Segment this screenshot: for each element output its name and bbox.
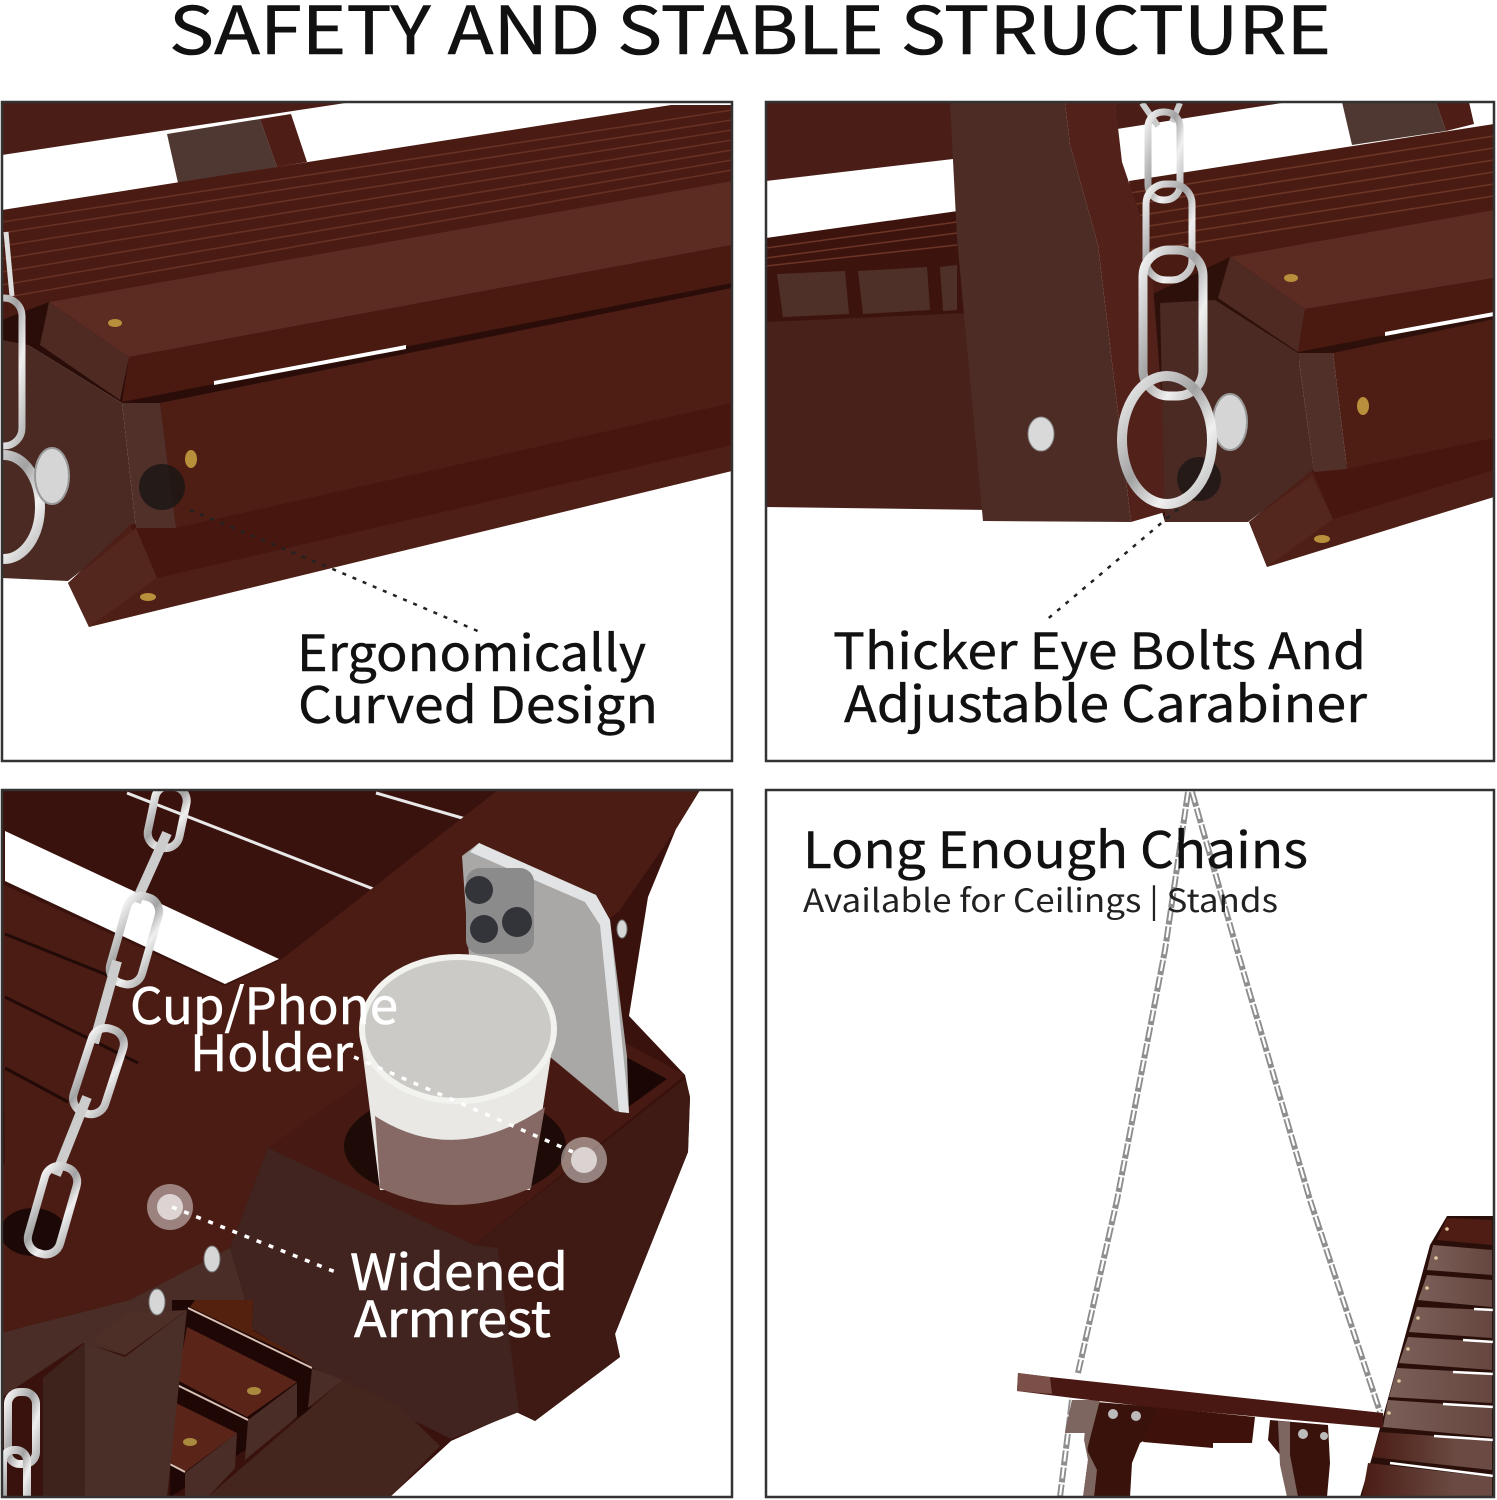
wood: front leg (43, 1310, 187, 1497)
wood: slat ends (777, 265, 957, 317)
wood: seat slats right (1129, 124, 1494, 310)
wood: side plate (2, 340, 136, 581)
wood: lower rail (68, 400, 732, 627)
caption: cup/phone holder: Holder (190, 1014, 354, 1086)
caption: widened armrest: Widened (350, 1233, 568, 1305)
wood: back slat right (1115, 102, 1288, 129)
wood: vertical post front (950, 102, 1131, 522)
gap in armrest (214, 345, 406, 385)
callout markers (147, 1137, 607, 1230)
wood: back slat left (766, 102, 953, 181)
wood: armrest top (49, 181, 732, 357)
callout leader line (190, 510, 480, 632)
panel border (766, 102, 1494, 761)
icon: hanging chains (1060, 792, 1380, 1497)
icon: silver bolts (149, 920, 627, 1315)
wood: overall silhouette (2, 790, 700, 1497)
wood: seat slats left (2, 884, 282, 1170)
thin gaps (127, 793, 469, 890)
caption: cup/phone holder: Cup/Phone (130, 967, 398, 1039)
icon: phone (462, 843, 629, 1113)
wood: side plate (1160, 300, 1314, 522)
wood: vertical post side (1065, 102, 1172, 522)
wood: armrest box top (268, 1040, 685, 1245)
heading: long enough chains: Long Enough Chains (803, 811, 1308, 883)
panel border (2, 102, 732, 761)
wood: lower frame left (766, 312, 990, 510)
icon: silver bolt (1028, 417, 1054, 451)
white gap between slats (5, 831, 279, 984)
wood: armrest underside (122, 245, 732, 402)
leader lines (172, 1057, 573, 1273)
wood: dark underlay (2, 181, 732, 528)
wood: main armrest beam (2, 790, 700, 1333)
wood: seat slats left (766, 210, 965, 322)
caption: cup/phone holder (130, 967, 398, 1086)
swing: front leg (1065, 1400, 1157, 1497)
caption: ergonomically curved design (297, 614, 658, 738)
panel: eye bolts and carabiner (766, 102, 1494, 622)
callout marker (1177, 457, 1221, 501)
panel border (766, 790, 1494, 1497)
caption: widened armrest (350, 1233, 568, 1352)
panel: cup and phone holder (0, 783, 700, 1500)
icon: chain and ring (0, 232, 69, 559)
panel: long enough chains (1017, 792, 1494, 1497)
caption: thicker eye bolts (833, 612, 1368, 737)
wood: main front face (1298, 319, 1494, 472)
swing: armrest seat (1017, 1373, 1383, 1428)
callout marker (139, 464, 185, 510)
wood: back post (167, 114, 307, 183)
wood: seat slats (3, 105, 731, 320)
panel border (2, 790, 732, 1497)
caption: thicker eye bolts: Adjustable Carabiner (844, 665, 1368, 737)
icon: cup holder hole (344, 1091, 566, 1201)
callout leader line (1044, 509, 1178, 622)
wood: back post right (1342, 102, 1474, 145)
wood: phone slot (620, 1056, 667, 1113)
swing: apron (1143, 1407, 1255, 1448)
icon: chain hole (0, 1208, 66, 1256)
wood: back slat (2, 102, 352, 155)
caption: ergonomically curved design: Curved Design (298, 666, 658, 738)
icon: paper cup (361, 957, 555, 1205)
swing: rear leg (1268, 1420, 1330, 1497)
wood: dark underlay (1130, 257, 1494, 522)
wood: main front face (122, 288, 732, 528)
caption: ergonomically curved design: Ergonomically (297, 614, 646, 686)
wood: lower rail (1249, 435, 1494, 567)
wood: beam front face (2, 1248, 254, 1397)
caption: widened armrest: Armrest (354, 1280, 551, 1352)
icon: brass screws (183, 1387, 261, 1446)
swing: backrest slats (1360, 1216, 1494, 1497)
icon: brass screws (1284, 274, 1369, 543)
subheading: available for ceilings and stands: Available for Ceilings | Stands (803, 876, 1278, 922)
wood: box front left (230, 1148, 519, 1439)
icon: chain, carabiner and ring (1122, 103, 1212, 504)
icon: chain (3, 783, 189, 1500)
wood: armrest (1218, 210, 1494, 352)
wood: lower seat planks (166, 1300, 440, 1497)
icon: brass screws (108, 319, 197, 601)
icon: eye bolt plate (1213, 394, 1247, 450)
caption: thicker eye bolts: Thicker Eye Bolts And (833, 612, 1366, 684)
wood: box front right (474, 1079, 690, 1421)
panel: ergonomically curved design (0, 102, 732, 632)
wood: armrest end (40, 302, 129, 400)
